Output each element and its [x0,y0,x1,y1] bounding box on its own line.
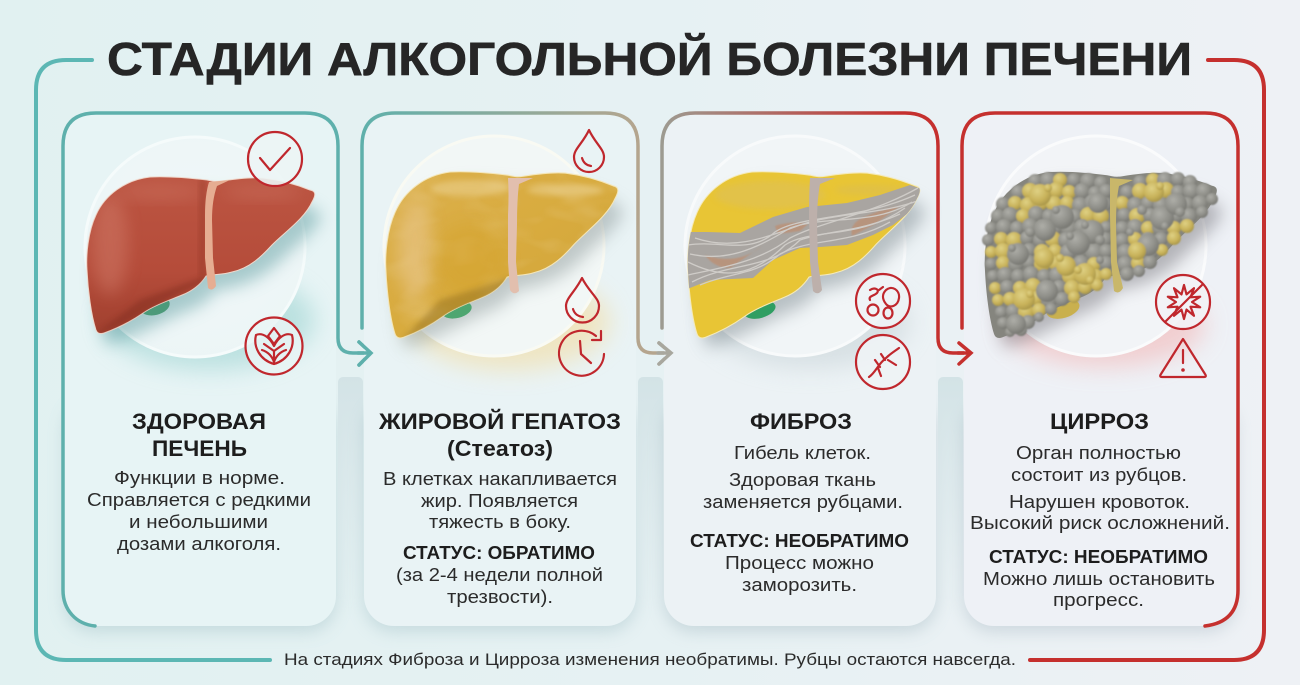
card outline [962,113,1238,626]
status: заморозить. [742,575,857,595]
description: и небольшими [129,512,268,532]
title: СТАДИИ АЛКОГОЛЬНОЙ БОЛЕЗНИ ПЕЧЕНИ [107,33,1192,85]
description: Функции в норме. [114,468,285,488]
description [383,469,617,532]
description: Гибель клеток. [734,443,871,463]
panel: fatty liver [358,113,671,632]
panel: healthy liver [63,113,371,632]
heading: ЖИРОВОЙ ГЕПАТОЗ [378,409,621,434]
status: СТАТУС: ОБРАТИМО [403,542,595,563]
description: В клетках накапливается [383,469,617,489]
description [970,443,1230,533]
liver: fatty [386,170,625,347]
status [983,546,1215,610]
description: заменяется рубцами. [703,492,903,512]
heading [378,409,621,461]
icon: warning [1160,339,1206,377]
icon: check [248,132,302,186]
icon: lotus [246,318,302,374]
description: Нарушен кровоток. [1009,492,1190,512]
heading: ЦИРРОЗ [1050,409,1149,434]
status: СТАТУС: НЕОБРАТИМО [989,546,1208,567]
status: (за 2-4 недели полной [396,565,603,585]
arrow into cirrhosis [958,343,971,364]
liver: healthy [87,177,322,344]
status: Процесс можно [725,553,874,573]
liver: cirrhosis [982,172,1224,347]
glow and disc [85,137,315,370]
icon: dying cells [856,274,910,328]
heading: ФИБРОЗ [750,409,852,434]
icon: no explosion [1156,275,1210,329]
glow and disc [986,136,1206,367]
heading [132,409,266,461]
glow and disc [685,136,910,368]
liver: fibrosis [680,172,927,347]
panel: fibrosis [658,113,970,632]
panel: cirrhosis [958,113,1238,632]
card outline with arrow [658,113,970,364]
description: Высокий риск осложнений. [970,513,1230,533]
footer note: На стадиях Фиброза и Цирроза изменения необратимы. Рубцы остаются навсегда. [284,651,1016,669]
card outline with arrow [63,113,371,626]
icon: scar fibre [856,335,910,389]
heading: (Стеатоз) [447,436,553,461]
description: Орган полностью [1016,443,1181,463]
icon: fat drop [574,130,604,172]
status: прогресс. [1053,590,1144,610]
status: СТАТУС: НЕОБРАТИМО [690,530,909,551]
description: дозами алкоголя. [117,534,281,554]
status: трезвости). [447,587,553,607]
description: жир. Появляется [421,491,578,511]
icon: drop [566,278,599,323]
card outline with arrow [358,113,671,365]
description: тяжесть в боку. [429,512,571,532]
icon: clock [559,331,604,376]
description [87,468,311,554]
description [703,443,903,512]
status [396,542,603,607]
status: Можно лишь остановить [983,569,1215,589]
status [690,530,909,595]
nodules [982,172,1218,337]
outer frame: red right bracket [1030,60,1264,660]
heading: ПЕЧЕНЬ [152,436,247,461]
outer frame: teal left bracket [36,60,270,660]
description: Справляется с редкими [87,490,311,510]
description: состоит из рубцов. [1011,465,1187,485]
glow and disc [384,136,610,370]
description: Здоровая ткань [729,470,876,490]
heading: ЗДОРОВАЯ [132,409,266,434]
